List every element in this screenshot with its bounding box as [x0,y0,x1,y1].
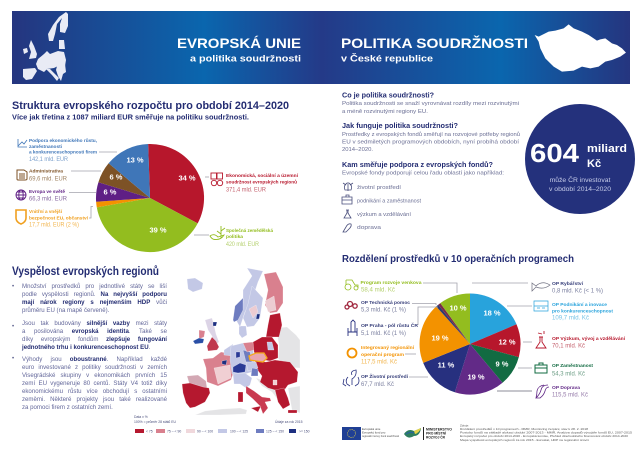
label: cohesion: 371,4 mld. EUR [226,188,267,194]
icon: briefcase [342,195,352,204]
label: agriculture: 420 mld. EUR [226,242,260,248]
label: economic growth [18,138,117,163]
text: Kam směřuje podpora [342,161,504,176]
list item: podnikání a zaměstnanost [342,195,421,204]
pie chart: EU budget: 6 % [104,188,117,196]
text: sources: Mapa vyspělosti evropských regionů za rok 2015 - Eurostat, HDP na regionální úrovni [460,438,589,442]
callout: 604 miliard Kč: 604 [530,138,580,168]
text block: bullet 2: a posilována evropská identita. Také se [22,328,167,335]
label: OP Výzkum [523,331,626,350]
icon: map of the Czech Republic [535,24,626,72]
label: OP Praha: OP Praha - pól růstu ČR [361,323,419,328]
text: Co je politika soudržnosti: Co je politika soudržnosti? [342,92,434,100]
text: Kam směřuje podpora: Evropské fondy podporují celou řadu oblastí jako například: [342,170,504,176]
label: OP Technická pomoc: OP Technická pomoc [361,300,411,305]
logo: Ministerstvo pro místní rozvoj: MINISTERSTVO [426,428,452,432]
icon: plant [343,182,353,191]
pie chart: EU budget: 39 % [149,226,167,234]
map of European regions [182,268,300,415]
list item: výzkum a vzdělávání: výzkum a vzdělávání [357,212,411,218]
subheading: budget structure: Více jak třetina z 1087 miliard EUR směřuje na politiku soudržnosti. [12,112,249,122]
text block: bullet 2: Jsou tak budovány silnější vazby mezi státy [22,320,167,327]
icon: road [536,385,549,398]
heading: budget structure: Struktura evropského rozpočtu pro období 2014–2020 [12,100,289,112]
callout: 604 miliard Kč: může ČR investovat [550,175,611,184]
map legend: < 75 [146,430,153,434]
text block: bullet 2 [22,320,168,351]
pie chart: EU budget: 13 % [126,156,144,164]
label: OP Rybářství: OP Rybářství [552,281,584,286]
label: OP Zaměstnanost: OP Zaměstnanost [552,363,594,368]
label: OP Doprava: OP Doprava [552,385,581,390]
label: Europe in the world: 66,3 mld. EUR [29,196,68,202]
text: Kam směřuje podpora: Kam směřuje podpora z evropských fondů? [342,161,493,169]
callout: 604 miliard Kč: miliard [587,143,627,155]
label: OP Technická pomoc: 5,3 mld. Kč (1 %) [361,308,406,314]
icon: hands with leaf [343,370,359,386]
heading: Evropská unie: EVROPSKÁ UNIE [177,35,301,51]
icon: fish [532,283,550,291]
label: Integrovaný regionální operační program [348,345,416,366]
label: OP Zaměstnanost [518,363,594,378]
text block: bullet 1 [22,282,167,314]
label: cohesion: soudržnost evropských regionů [226,180,297,184]
pie chart: operational programmes: 10 % [449,304,467,312]
label: Program rozvoje venkova: Program rozvoje venkova [360,280,422,285]
text: Jak funguje politika soudržnosti: Jak funguje politika soudržnosti? [342,123,458,130]
pie chart: EU budget: 6 % [110,172,123,182]
map legend [134,415,310,434]
icon: shield [16,210,26,224]
label: agriculture: Společná zemědělská [226,228,274,233]
bullet markers: • [12,324,14,330]
text: Co je politika soudržnosti: a méně rozvinutými regiony EU. [342,109,428,115]
text block: bullet 3: za pomoci firem z ostatních zemí. [22,404,113,411]
label: Program rozvoje venkova [345,280,457,294]
label: economic growth: a konkurenceschopnosti firem [29,150,97,154]
pie chart: operational programmes: 19 % [431,334,449,342]
text: sources: Postoby fondů na základě alokací období 2007-2013 - MMR, Analýza dopadů vývojáře fondů EU, 2007-2015 [460,430,632,434]
label: OP Doprava [497,385,588,398]
label: agriculture: politika [226,234,244,239]
label: Europe in the world: Evropa ve světě [29,189,66,194]
text: Co je politika soudržnosti [342,92,519,115]
pie chart: operational programmes: 9 % [496,360,509,368]
label: administration [17,168,101,182]
text block: bullet 1: Množství prostředků pro jednotlivé státy se liší [22,283,167,290]
logo: Ministerstvo pro místní rozvoj: ROZVOJ ČR [426,434,445,440]
label: OP Podnikání a inovace: 109,7 mld. Kč [552,316,589,322]
icon: growth chart [18,139,27,147]
label: security and citizenship: Vnitřní a vnější [29,209,63,214]
callout: 604 miliard Kč [525,104,635,214]
subheading: v České republice: v České republice [341,52,433,64]
heading: Politika soudržnosti: POLITIKA SOUDRŽNOSTI [341,34,528,51]
label: economic growth: zaměstnanosti [29,144,62,149]
pie chart: EU budget [96,144,204,252]
logo: European Union: regionální rozvoj, Fond soudržnosti [362,434,399,438]
pie chart: operational programmes: 18 % [483,308,501,318]
map legend: 100% = průměr 28 států EU [134,420,176,424]
label: administration: Administrativa [29,168,64,174]
icon: globe [16,190,26,200]
list item: životní prostředí: životní prostředí [357,185,401,191]
pie chart: EU budget: 34 % [178,174,196,182]
list item: výzkum a vzdělávání [344,210,411,218]
text block: bullet 3 [22,356,167,411]
label: OP Podnikání a inovace [507,301,614,322]
label: cohesion: Ekonomická, sociální a územní [226,173,299,178]
list item: životní prostředí [343,182,401,191]
logo: European Union: Evropská unie [362,427,381,431]
list item: doprava: doprava [357,225,382,231]
text block: bullet 3: Visegrádské skupiny v ekonomikách prvních 15 [22,372,167,379]
label: Integrovaný regionální operační program: 117,5 mld. Kč [361,360,397,366]
text block: bullet 1: průměru EU (na mapě červeně). [22,307,109,314]
map legend: 125 – < 150 [266,430,284,434]
icon: factory [534,301,548,311]
bullet markers [12,284,14,362]
label: administration: 69,6 mld. EUR [29,176,68,182]
text: sources: Rozdělení prostředků v 10 programech - MMR, Monitoring čerpání, stav k 28. 2. 2018 [460,427,588,431]
map legend: Data v % [134,415,148,419]
text block: bullet 3: zemí EU vygeneruje 80 centů. Státy V4 totiž díky [22,380,167,387]
label: OP Životní prostředí: 67,7 mld. Kč [361,382,394,388]
banner: Politika soudržnosti [322,11,630,84]
label: OP Zaměstnanost: 54,3 mld. Kč [552,372,585,378]
label: Integrovaný regionální operační program: operační program [361,352,404,357]
logo: European Union [342,427,399,440]
logo: European Union: Evropský fond pro [362,430,386,434]
text: sources: Evropský rozpočet pro období 2014-2020 - Evropská komise, Přehled dlouhodobého financování období 2014-2020 [460,434,628,438]
label: cohesion [205,173,299,194]
text block: bullet 2: díky evropským fondům zlepšuje fungování [22,336,167,343]
text: sources [460,424,632,442]
label: OP Rybářství [472,281,603,294]
callout: 604 miliard Kč: v období 2014–2020 [549,186,611,193]
pie chart: operational programmes: 19 % [467,372,485,382]
icon: briefcase [535,363,547,373]
heading: operational programmes: Rozdělení prostředků v 10 operačních programech [342,253,574,265]
map legend: 90 – < 100 [197,430,213,434]
label: OP Technická pomoc [345,300,436,314]
label: OP Podnikání a inovace: pro konkurenceschopnost [552,308,614,314]
text: Co je politika soudržnosti: Politika soudržnosti se snaží vyrovnávat rozdíly mezi rozvinutými [342,101,519,107]
heading: regional development: Vyspělost evropských regionů [12,266,159,278]
text block: bullet 3: zeměmi. Některé projekty jsou také realizované [22,396,167,403]
icon: map of the EU [23,12,68,81]
icon: plant in hand [210,226,225,240]
text block: bullet 1: podle vyspělosti regionů. Na nejvyšší podporu [22,291,167,298]
logo: Ministerstvo pro místní rozvoj: PRO MÍSTNÍ [426,430,447,436]
map legend: 100 – < 125 [230,430,248,434]
icon: gears [345,302,357,309]
label: OP Rybářství: 0,8 mld. Kč (< 1 %) [552,288,603,294]
label: OP Životní prostředí: OP Životní prostředí [361,374,409,379]
map legend: >= 150 [299,430,310,434]
label: OP Výzkum: 70,1 mld. Kč [552,344,585,350]
map legend: 75 – < 90 [167,430,181,434]
label: OP Podnikání a inovace: OP Podnikání a inovace [552,302,608,307]
label: economic growth: Podpora ekonomického růstu, [29,138,97,143]
text block: bullet 2: jednotného trhu i konkurenceschopnost EU. [22,344,150,351]
label: OP Výzkum: OP Výzkum, vývoj a vzdělávání [552,336,626,341]
icon: flask [536,331,546,348]
bullet markers: • [12,356,14,362]
text block: bullet 3: ekonomickému růstu více obchodují s ostatními [22,388,167,395]
label: OP Životní prostředí [343,370,428,388]
logo: Ministerstvo pro místní rozvoj [404,427,452,440]
pie chart: operational programmes: 12 % [498,338,516,346]
map legend: Údaje za rok 2015 [275,419,303,424]
label: OP Praha: 5,1 mld. Kč (1 %) [361,331,406,337]
label: economic growth: 142,1 mld. EUR [29,157,69,163]
label: Integrovaný regionální operační program: Integrovaný regionální [361,345,415,350]
icon: hands and map [211,173,223,186]
icon: document [17,170,27,180]
label: OP Doprava: 115,5 mld. Kč [552,392,588,398]
label: security and citizenship [16,206,93,228]
text: Jak funguje politika soudržnosti: EU v sedmiletých programových obdobích, nyní probíhá období [342,140,519,146]
text block: bullet 1: mají nárok regiony s nejmenším HDP vůči [22,299,167,306]
label: security and citizenship: bezpečnost EU, občanství [29,216,89,220]
banner: Evropská unie [12,11,322,84]
list item: podnikání a zaměstnanost: podnikání a zaměstnanost [357,198,421,204]
icon: Prague tower [348,320,357,336]
pie chart: operational programmes [420,293,521,395]
icon: flask [344,210,351,218]
text: sources: Zdroje: [460,424,469,428]
label: agriculture [194,226,274,248]
label: security and citizenship: 17,7 mld. EUR (2 %) [29,222,79,228]
text: Jak funguje politika soudržnosti: Prostředky z evropských fondů směřují na rozvojové potřeby regionů [342,131,520,138]
icon: tractor [346,280,358,288]
icon: road [343,224,351,232]
pie chart: operational programmes: 11 % [438,360,455,370]
subheading: a politika soudržnosti: a politika soudržnosti [190,54,301,64]
callout: 604 miliard Kč: Kč [587,158,601,170]
text block: bullet 3: euro investované z politiky soudržnosti v zemích [22,364,167,371]
text: Jak funguje politika soudržnosti [342,123,520,153]
bullet markers: • [12,284,14,290]
label: Europe in the world [16,189,96,202]
icon: ring [348,348,356,358]
label: Program rozvoje venkova: 58,4 mld. Kč [361,288,395,294]
list item: doprava [343,224,382,232]
label: OP Praha [348,307,438,337]
text block: bullet 3: Výhody jsou oboustranné. Například každé [22,356,167,363]
text: Jak funguje politika soudržnosti: 2014–2020. [342,147,373,153]
